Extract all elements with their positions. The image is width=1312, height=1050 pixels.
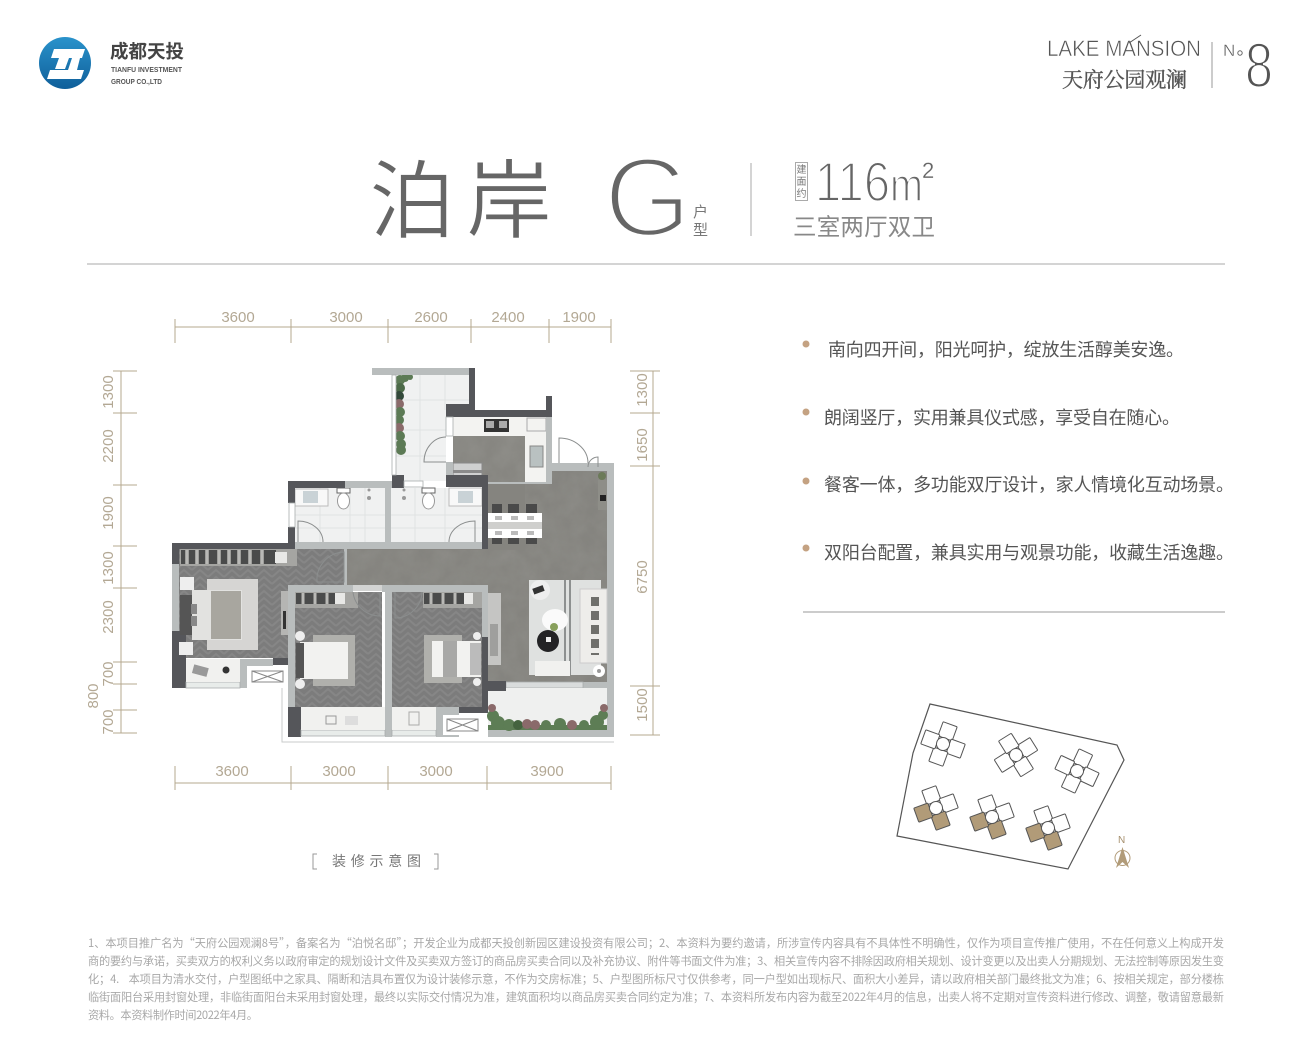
site map [897, 704, 1130, 869]
right dimensions: 1300 [634, 373, 651, 407]
windows [186, 375, 583, 736]
disclaimer: 1、本项目推广名为“天府公园观澜8号”，备案名为“泊悦名邸”；开发企业为成都天投创新园区建设投资有限公司；2、本资料为要约邀请，所涉宣传内容具有不具体性不明确性，仅作为项目宣传推广使用，不在任何意义上构成开发 [88, 935, 1224, 951]
bed [432, 641, 481, 677]
disclaimer [88, 935, 1224, 1023]
area value: m [890, 159, 923, 211]
area label: 面 [796, 177, 806, 188]
company english name: GROUP CO.,LTD [111, 77, 162, 86]
bedroom two balcony [301, 707, 385, 730]
rug [207, 579, 258, 650]
vanity left [295, 489, 328, 506]
plants [487, 704, 608, 731]
top dimensions: 3600 [221, 309, 255, 326]
left dimensions: 2300 [100, 600, 117, 634]
left dimensions: 700 [100, 661, 117, 687]
company english name [111, 65, 182, 86]
disclaimer: 化；4. 本项目为清水交付，户型图纸中之家具、隔断和洁具布置仅为设计装修示意，不作为交房标准；5、户型图所标尺寸仅供参考，同一户型如出现标尺、面积大小差异，请以政府相关部门最终批文为准；6、按相关规定，部分楼栋 [88, 971, 1224, 987]
number 8: 8 [1245, 31, 1273, 101]
dining table [488, 504, 542, 544]
top dimensions: 1900 [562, 309, 596, 326]
area label: 建 [796, 163, 806, 176]
living and hall floor [345, 471, 607, 682]
heading name [369, 154, 552, 250]
washer box [443, 715, 481, 735]
kitchen sink [530, 446, 543, 467]
area label [796, 162, 808, 200]
door threshold [353, 585, 382, 591]
right dimensions [630, 371, 660, 735]
rug [313, 635, 355, 686]
disclaimer: 商的要约与承诺，买卖双方的权利义务以政府审定的规划设计文件及买卖双方签订的商品房买卖合同以及补充协议、附件等书面文件为准；3、相关宣传内容不排除因政府相关规划、设计变更以及出卖人分期规划、无法控制等原因发生变 [88, 953, 1224, 969]
toilet right [422, 488, 435, 509]
fridge niche [527, 418, 546, 431]
vanity right [449, 488, 482, 506]
bathroom fixtures [295, 488, 482, 509]
left dimensions: 1300 [100, 375, 117, 409]
master bedroom [179, 549, 297, 688]
point one: 南向四开间，阳光呵护，绽放生活醇美安逸。 [828, 340, 1184, 360]
living room set [529, 580, 607, 677]
area label: 约 [796, 187, 806, 200]
point four: 双阳台配置，兼具实用与观景功能，收藏生活逸趣。 [824, 543, 1234, 563]
tile grid [295, 375, 482, 542]
outer balcony line [282, 684, 614, 742]
highlighted buildings [909, 781, 1075, 855]
doors [298, 437, 598, 618]
heading name: 岸 [466, 154, 552, 250]
top dimensions: 2400 [491, 309, 525, 326]
toilet left [337, 488, 350, 509]
point three: 餐客一体，多功能双厅设计，家人情境化互动场景。 [824, 475, 1234, 495]
logo emblem [39, 37, 91, 89]
floor drains [367, 488, 406, 500]
wardrobe [295, 592, 358, 608]
bedroom three balcony [392, 707, 436, 730]
media console [488, 593, 501, 665]
kitchen [453, 417, 546, 482]
title [369, 135, 935, 260]
bottom dimensions: 3000 [419, 763, 453, 780]
right dimensions: 1650 [634, 428, 651, 462]
bottom dimensions: 3600 [215, 763, 249, 780]
right dimensions: 1500 [634, 688, 651, 722]
unit letter: G [604, 135, 691, 260]
wardrobe [423, 592, 482, 608]
project english name: LAKE MANSION [1047, 36, 1201, 61]
nightstands [179, 577, 194, 655]
unit type label [693, 204, 708, 239]
bathroom and balcony tile [295, 375, 482, 542]
floor plan [85, 309, 660, 790]
disclaimer: 资料。本资料制作时间2022年4月。 [88, 1007, 258, 1023]
north compass [1115, 835, 1130, 868]
heading name: 泊 [369, 154, 455, 250]
top dimensions: 3000 [329, 309, 363, 326]
wardrobe [180, 549, 297, 566]
bedroom two [295, 592, 385, 730]
left dimensions: 2200 [100, 429, 117, 463]
bottom dimensions [175, 763, 611, 790]
steel unit [453, 463, 482, 481]
bedroom three [392, 592, 482, 735]
bed [180, 590, 242, 640]
tv unit [281, 591, 288, 635]
project logo [1047, 31, 1273, 101]
left dimensions: 700 [100, 709, 117, 735]
north compass: N [1118, 835, 1125, 846]
left dimensions [85, 371, 137, 735]
rug [424, 635, 462, 683]
number 8 [1223, 31, 1273, 101]
right dimensions: 6750 [634, 560, 651, 594]
project chinese name: 天府公园观澜 [1062, 64, 1187, 94]
company english name: TIANFU INVESTMENT [111, 65, 182, 74]
hob [484, 419, 509, 432]
unit type label: 户 [693, 204, 708, 221]
company logo [39, 37, 184, 89]
top buildings [916, 717, 1105, 799]
light walls [172, 368, 614, 737]
balcony plants top [394, 374, 413, 455]
left dimensions: 1900 [100, 496, 117, 530]
selling points [802, 340, 1234, 563]
shelf and plant [598, 472, 607, 510]
dark walls [172, 368, 552, 737]
top dimensions: 2600 [414, 309, 448, 326]
bed [296, 642, 348, 679]
washer box [247, 666, 288, 688]
bottom dimensions: 3000 [322, 763, 356, 780]
area value: 2 [922, 158, 934, 183]
number 8: N [1223, 41, 1235, 60]
south balcony [487, 681, 608, 731]
bottom dimensions: 3900 [530, 763, 564, 780]
left dimensions: 800 [85, 683, 102, 709]
bedroom floors [179, 549, 482, 707]
master balcony [186, 659, 240, 682]
point two: 朗阔竖厅，实用兼具仪式感，享受自在随心。 [824, 408, 1180, 428]
unit type label: 型 [693, 222, 708, 239]
disclaimer: 临街面阳台采用封窗处理，非临街面阳台未采用封窗处理，最终以实际交付情况为准，建筑面积均以商品房买卖合同约定为准；7、本资料所发布内容为截至2022年4月的信息，出卖人将不定期对宣传资料进行修改、调整，敬请留意最新 [88, 989, 1224, 1005]
top dimensions [175, 309, 611, 343]
left dimensions: 1300 [100, 551, 117, 585]
company name: 成都天投 [110, 41, 184, 62]
room summary: 三室两厅双卫 [793, 214, 935, 240]
decoration caption: 装修示意图 [332, 853, 421, 869]
area value: 116 [815, 150, 890, 213]
